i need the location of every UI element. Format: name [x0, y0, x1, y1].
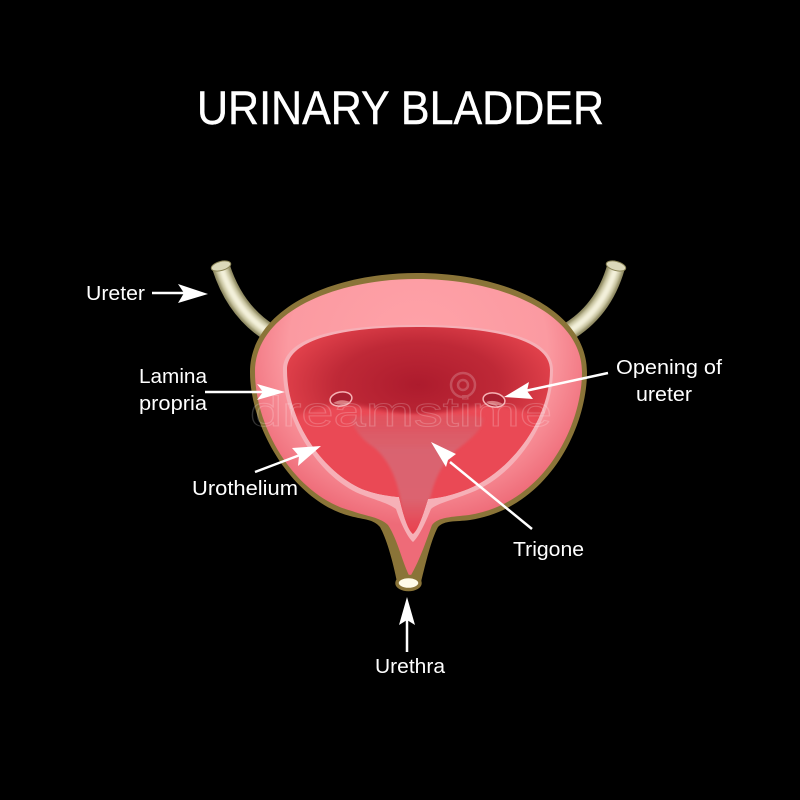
label: Urothelium: Urothelium: [192, 478, 298, 500]
bladder muscular wall: [255, 279, 582, 577]
urothelium light rim: [283, 325, 553, 542]
watermark: dreamstime: [250, 388, 552, 435]
label: Lamina propria: Lamina: [139, 366, 208, 388]
trigone: [350, 414, 484, 534]
urethra opening: [397, 576, 420, 590]
icon: right ureter tube: [566, 259, 627, 333]
icon: left ureter tube: [210, 259, 270, 333]
arrow: urethra: [399, 597, 415, 652]
label: Opening of ureter: [504, 357, 722, 406]
label: Opening of ureter: Opening of: [616, 357, 722, 379]
opening of left ureter: [329, 390, 353, 408]
arrow: opening of ureter: [504, 373, 608, 399]
label: Urothelium: [192, 446, 321, 500]
arrow: trigone: [431, 442, 532, 529]
label: Ureter: Ureter: [86, 283, 145, 305]
title: URINARY BLADDER: [197, 81, 604, 134]
lower cavity floor and trigone: [296, 403, 540, 534]
lower cavity floor: [296, 403, 540, 520]
label: Lamina propria: propria: [139, 393, 208, 415]
label: Urethra: Urethra: [375, 656, 446, 678]
watermark: [250, 373, 552, 435]
arrow: ureter: [152, 284, 208, 303]
label: Trigone: [431, 442, 584, 561]
bladder cavity: [287, 327, 550, 534]
bladder illustration: [210, 259, 627, 590]
label: Opening of ureter: ureter: [636, 384, 692, 406]
label: Trigone: Trigone: [513, 539, 584, 561]
label: Ureter: [86, 283, 208, 305]
label: Urethra: [375, 597, 446, 678]
arrow: urothelium: [255, 446, 321, 472]
opening of right ureter: [482, 391, 506, 409]
arrow: lamina propria: [205, 384, 285, 400]
bladder outer olive wall: [250, 273, 587, 582]
label: Lamina propria: [139, 366, 285, 415]
